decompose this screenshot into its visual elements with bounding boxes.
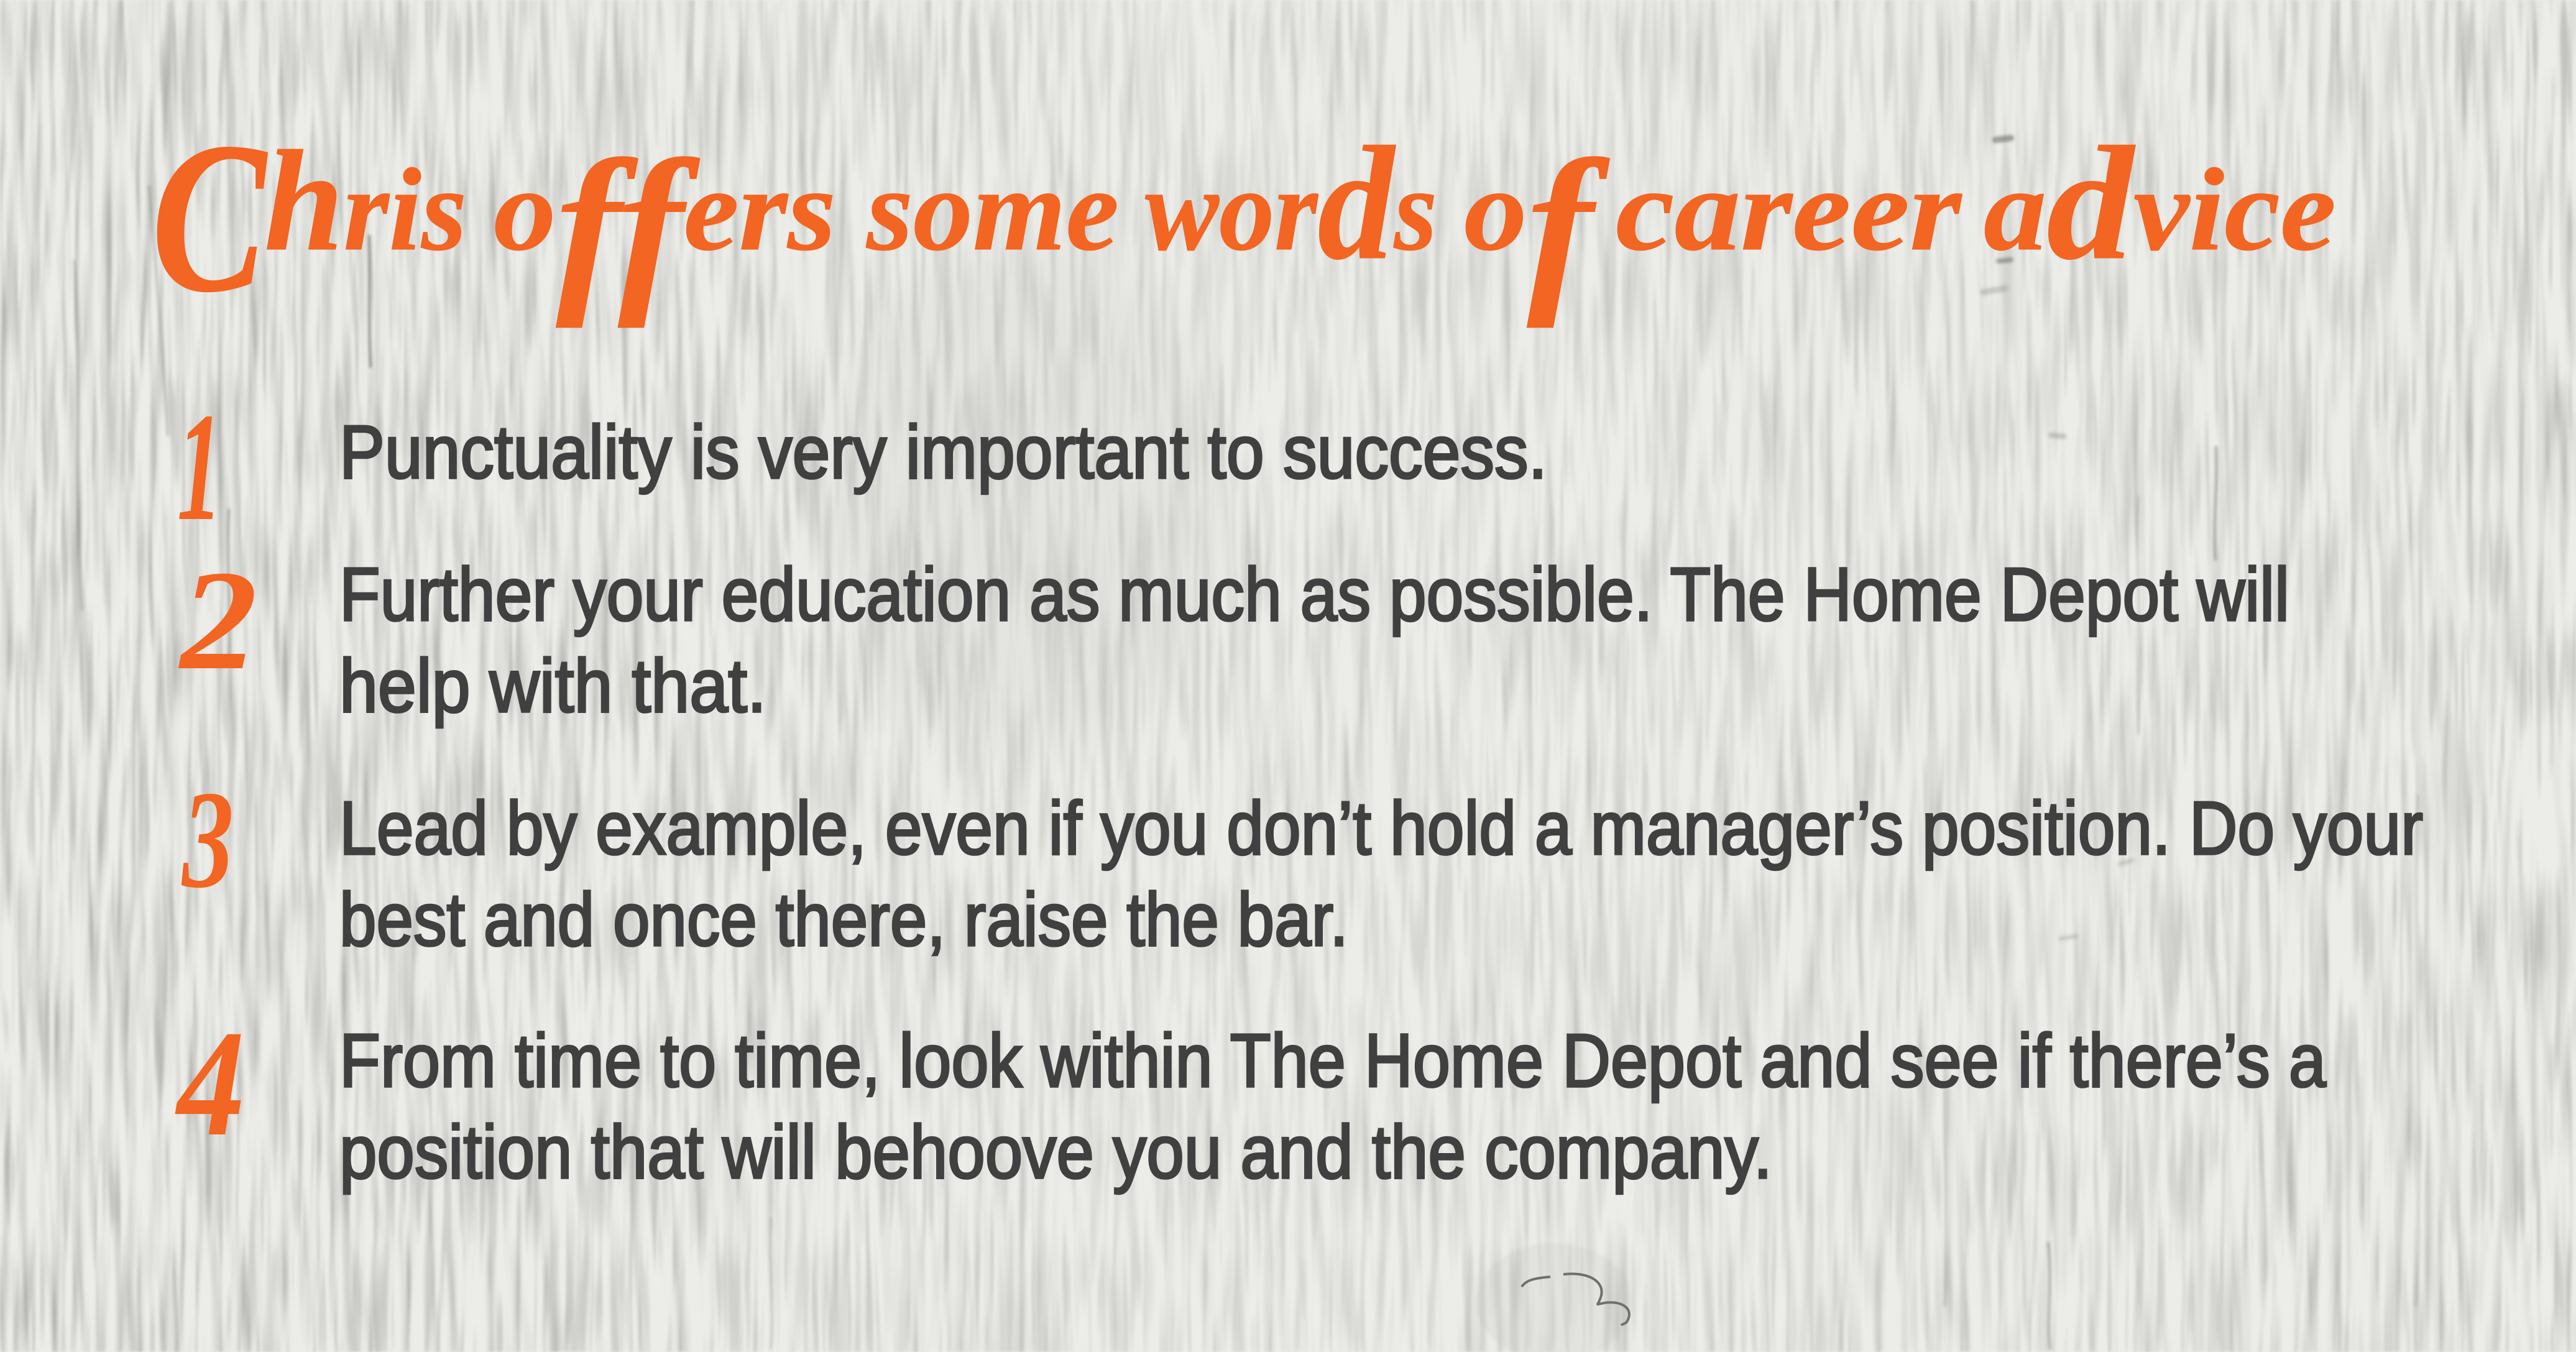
number 2: 2 [178, 541, 257, 699]
title: f [1527, 122, 1611, 329]
advice item 2 [178, 541, 2289, 728]
item 1 text: Punctuality is very important to success. [339, 410, 1547, 494]
advice item 1 [177, 381, 1547, 553]
title: C [152, 98, 269, 336]
item 4 text: position that will behoove you and the company. [339, 1110, 1772, 1194]
title: hris [264, 121, 467, 281]
item 3 text: best and once there, raise the bar. [339, 877, 1348, 962]
title: ers [684, 145, 836, 275]
title [152, 98, 2336, 336]
item 4 text [339, 1018, 2326, 1194]
title: ff [556, 122, 701, 329]
title: s [1393, 145, 1437, 275]
title: career [1616, 145, 1962, 275]
advice item 3 [182, 761, 2423, 962]
title: d [1318, 113, 1396, 293]
title: vice [2133, 145, 2336, 275]
title: wor [1145, 145, 1329, 275]
title: o [494, 145, 553, 275]
title: some [865, 145, 1119, 275]
item 3 text [339, 786, 2423, 962]
number 3: 3 [182, 761, 234, 917]
item 4 text: From time to time, look within The Home Depot and see if there’s a [339, 1018, 2326, 1103]
advice item 4 [175, 999, 2326, 1194]
title: d [2046, 113, 2136, 293]
item 2 text: Further your education as much as possible. The Home Depot will [339, 552, 2289, 637]
number 4: 4 [175, 999, 245, 1167]
item 2 text [339, 552, 2289, 728]
item 2 text: help with that. [339, 643, 766, 728]
number 1: 1 [177, 381, 222, 553]
title: o [1464, 145, 1523, 275]
title: a [1984, 145, 2043, 275]
